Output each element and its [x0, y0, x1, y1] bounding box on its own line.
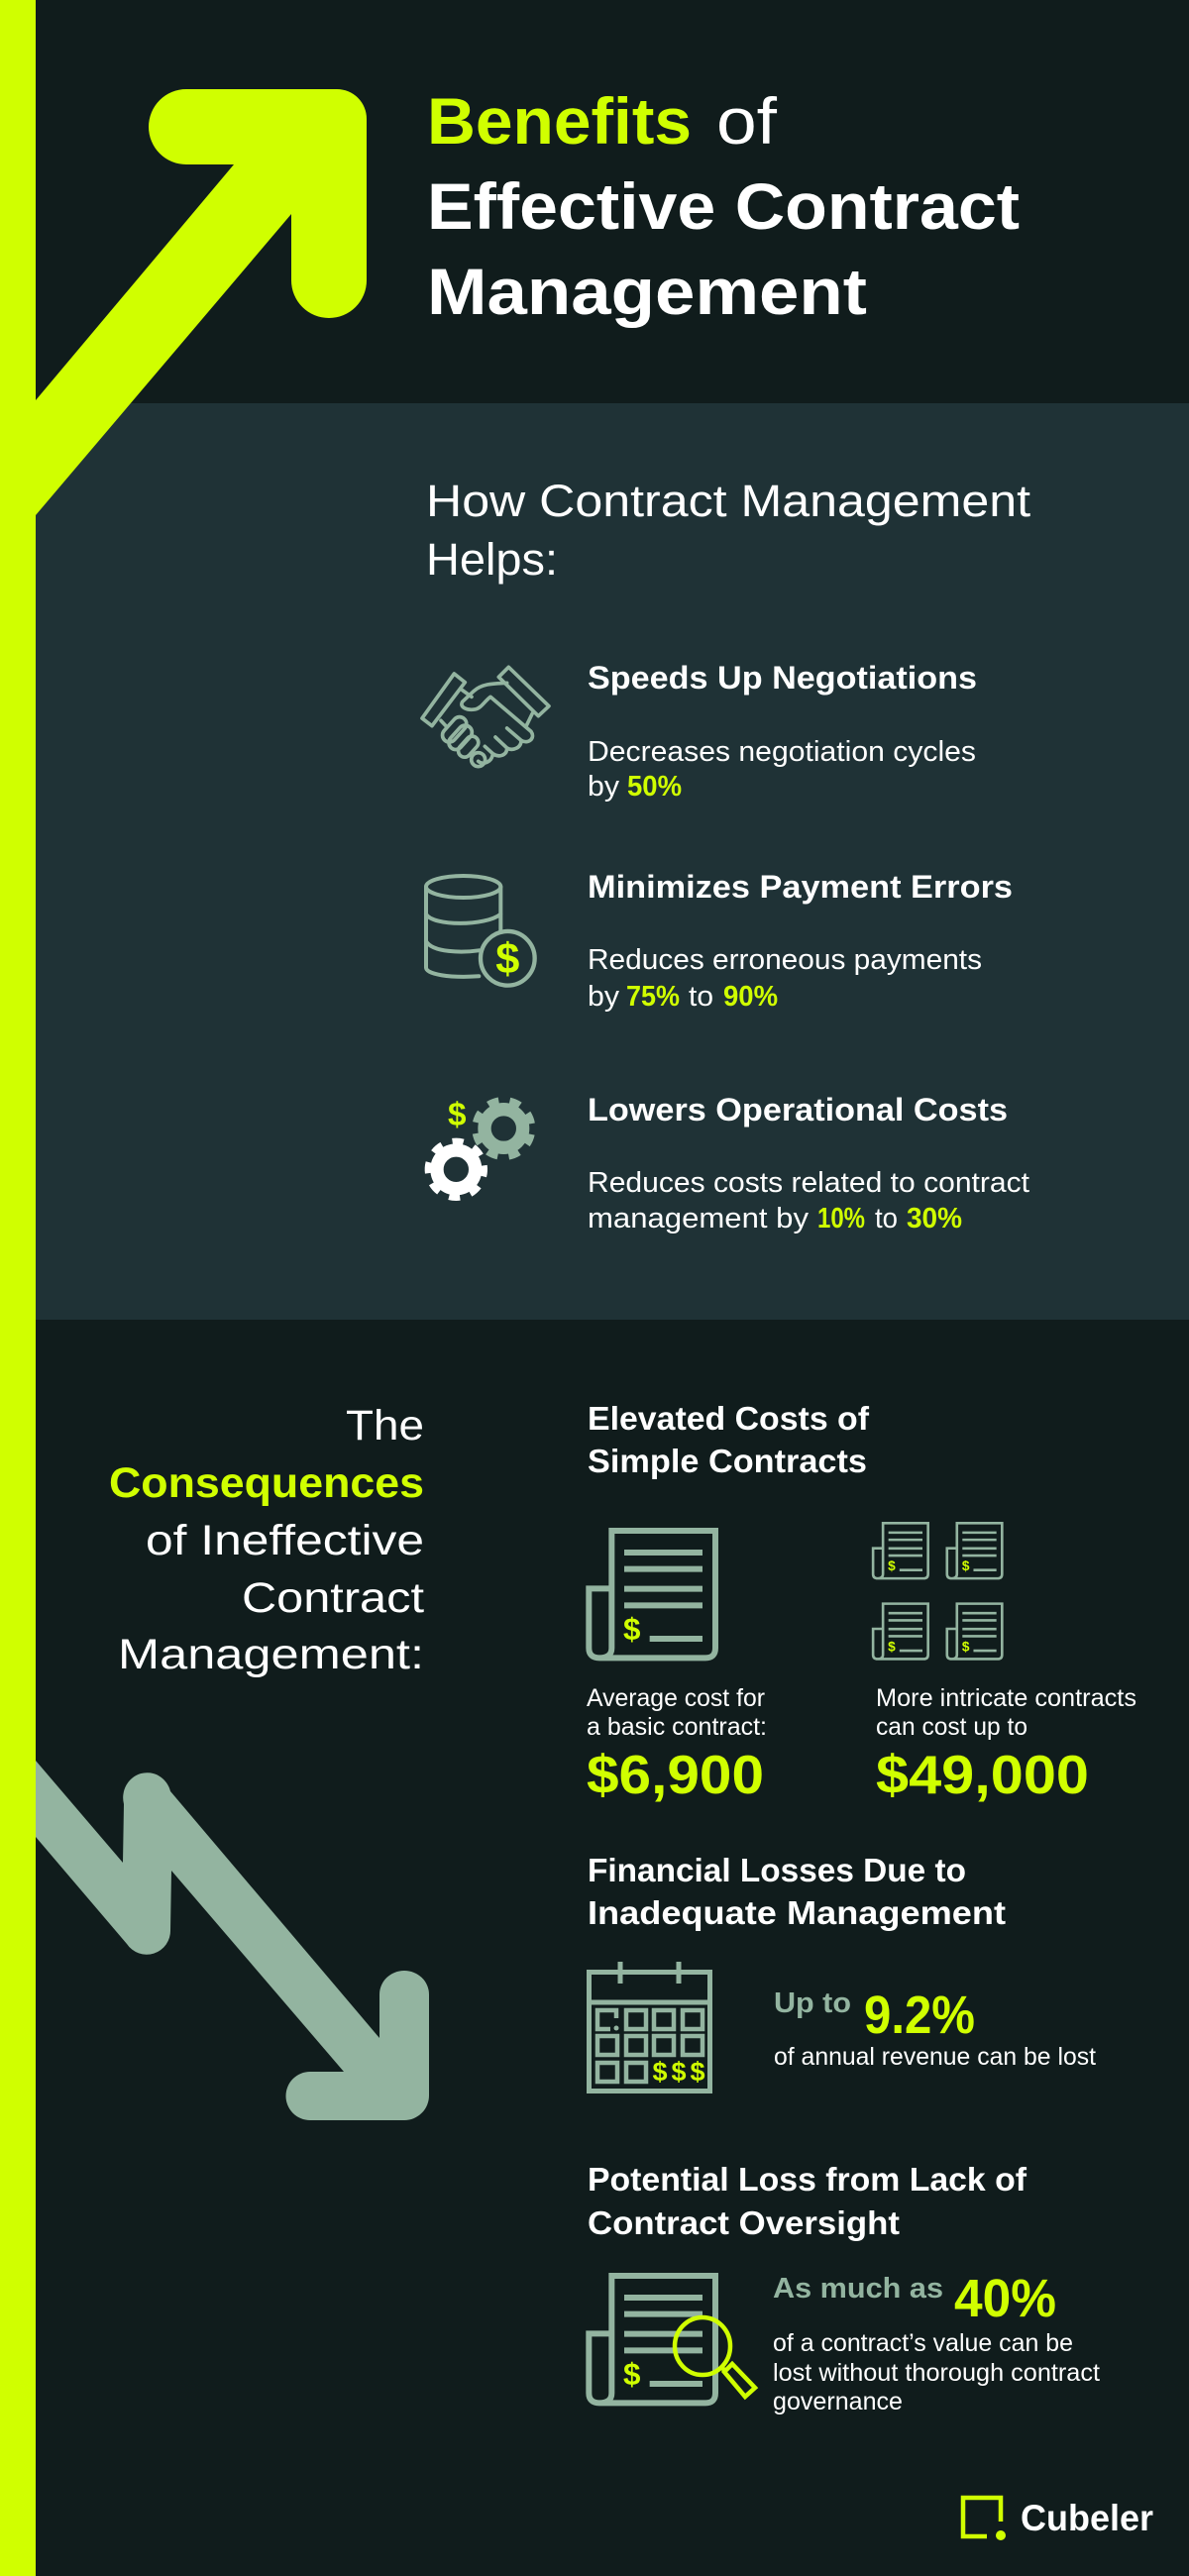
icon: four intricate contract documents: $	[888, 1558, 896, 1573]
stat: contract value lost: 40%	[954, 2269, 1056, 2328]
heading: Lowers Operational Costs	[588, 1092, 1008, 1127]
description	[588, 1167, 1029, 1234]
icon: calendar: $	[652, 2057, 668, 2087]
stat: contract value lost: of a contract’s value can be	[773, 2329, 1073, 2357]
stat: basic contract cost	[587, 1684, 767, 1805]
description	[588, 944, 982, 1013]
description: 75%	[626, 981, 680, 1013]
heading	[588, 1400, 870, 1479]
icon: calendar: $	[671, 2057, 687, 2087]
icon: calendar: $	[690, 2057, 705, 2087]
heading: Contract Oversight	[588, 2204, 900, 2241]
heading: Financial Losses Due to	[588, 1852, 966, 1888]
icon: four intricate contract documents: $	[888, 1639, 896, 1654]
section: financial losses	[588, 1852, 1096, 2091]
stat: revenue lost: of annual revenue can be lost	[774, 2043, 1096, 2071]
title: Effective Contract	[427, 169, 1020, 243]
section: potential loss	[588, 2161, 1100, 2415]
benefit: minimizes payment errors	[426, 869, 1013, 1013]
heading: how contract management helps: How Contract Management	[426, 476, 1031, 526]
heading: the consequences of ineffective contract management: of Ineffective	[146, 1517, 424, 1564]
title	[427, 84, 1020, 328]
description: 90%	[723, 981, 778, 1013]
stat: contract value lost: governance	[773, 2388, 903, 2415]
heading: the consequences of ineffective contract management: Management:	[118, 1631, 424, 1678]
heading	[588, 1852, 1006, 1931]
icon: handshake	[422, 667, 549, 767]
icon: up arrow	[36, 89, 367, 515]
icon: gears with dollar: $	[448, 1097, 467, 1133]
description: 30%	[907, 1203, 962, 1234]
heading: how contract management helps: Helps:	[426, 534, 558, 585]
icon: database with coin: $	[495, 935, 519, 983]
title: of	[716, 84, 778, 158]
icon: contract under magnifier: $	[623, 2357, 640, 2392]
heading: the consequences of ineffective contract management: Consequences	[109, 1459, 424, 1507]
description: Reduces erroneous payments	[588, 944, 982, 976]
heading: the consequences of ineffective contract management	[109, 1402, 424, 1678]
heading: the consequences of ineffective contract management: The	[346, 1402, 424, 1449]
heading: Minimizes Payment Errors	[588, 869, 1013, 905]
stat: intricate contract cost: $49,000	[876, 1744, 1089, 1805]
benefit: lowers operational costs	[425, 1092, 1029, 1234]
description: to	[689, 981, 713, 1013]
stat: revenue lost: 9.2%	[864, 1986, 975, 2045]
stat: contract value lost: lost without thorough contract	[773, 2359, 1100, 2387]
description: Decreases negotiation cycles	[588, 736, 976, 768]
heading: the consequences of ineffective contract management: Contract	[242, 1574, 424, 1622]
panel: how contract management helps background	[0, 403, 1189, 1320]
icon: four intricate contract documents	[873, 1523, 1002, 1659]
description: to	[875, 1203, 898, 1234]
description: 10%	[817, 1203, 865, 1234]
stat: contract value lost: As much as	[773, 2273, 943, 2305]
stat: revenue lost	[774, 1986, 1096, 2071]
left lime sidebar	[0, 0, 36, 2576]
description: by	[588, 981, 620, 1013]
heading	[588, 2161, 1027, 2241]
icon: gears with dollar	[425, 1095, 537, 1201]
icon: four intricate contract documents: $	[962, 1558, 970, 1573]
heading: Elevated Costs of	[588, 1400, 870, 1437]
icon: contract under magnifier	[589, 2276, 755, 2403]
stat: intricate contract cost	[876, 1684, 1136, 1805]
description: Reduces costs related to contract	[588, 1167, 1029, 1199]
description: by	[588, 771, 620, 803]
stat: basic contract cost: Average cost for	[587, 1684, 765, 1712]
title: Management	[427, 255, 867, 328]
icon: calendar	[589, 1962, 710, 2091]
stat: revenue lost: Up to	[774, 1987, 851, 2019]
description	[588, 736, 976, 803]
title: Benefits	[427, 84, 692, 158]
heading: how contract management helps	[426, 476, 1031, 585]
heading: Simple Contracts	[588, 1443, 867, 1479]
stat: intricate contract cost: More intricate contracts	[876, 1684, 1136, 1712]
heading: Potential Loss from Lack of	[588, 2161, 1027, 2198]
stat: contract value lost	[773, 2269, 1100, 2415]
section: elevated costs of simple contracts	[587, 1400, 1136, 1805]
icon: basic contract document: $	[623, 1612, 640, 1647]
icon: database with coin	[426, 876, 535, 986]
icon: basic contract document	[589, 1531, 715, 1658]
heading: Inadequate Management	[588, 1894, 1006, 1931]
heading: Speeds Up Negotiations	[588, 660, 977, 696]
description: 50%	[627, 771, 682, 803]
stat: intricate contract cost: can cost up to	[876, 1713, 1027, 1741]
stat: basic contract cost: $6,900	[587, 1744, 764, 1805]
benefit: speeds up negotiations	[422, 660, 977, 803]
logo: Cubeler	[963, 2498, 1153, 2540]
logo: Cubeler: Cubeler	[1021, 2498, 1153, 2538]
description: management by	[588, 1203, 810, 1234]
icon: down arrow	[36, 1761, 429, 2120]
stat: basic contract cost: a basic contract:	[587, 1713, 767, 1741]
icon: four intricate contract documents: $	[962, 1639, 970, 1654]
